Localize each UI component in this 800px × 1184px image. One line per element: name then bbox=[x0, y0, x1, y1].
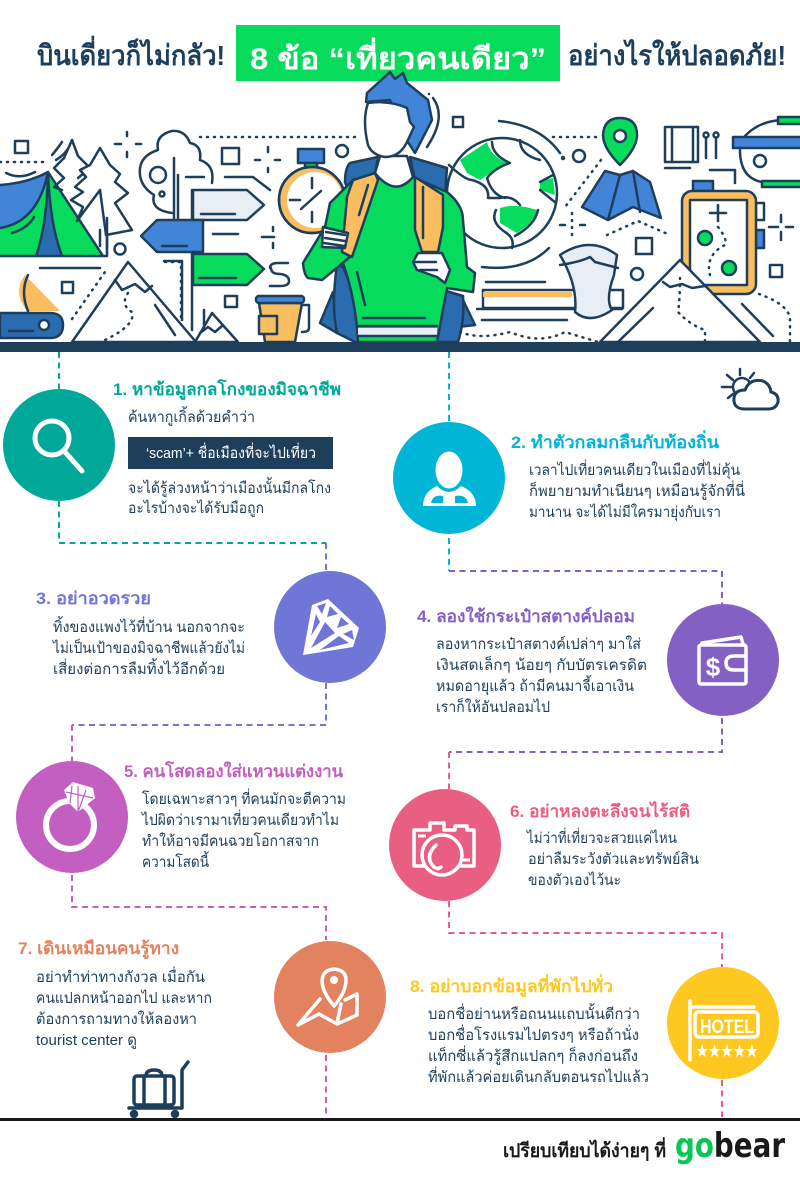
neck bbox=[375, 156, 413, 187]
text: tip 3 body bbox=[52, 616, 245, 678]
panel: tip 1 bbox=[3, 379, 341, 517]
panel: tip 4 bbox=[417, 604, 779, 716]
text: tip 5 body bbox=[141, 788, 346, 871]
icon: camera bbox=[389, 789, 501, 901]
footer: comparison line and logo: เปรียบเทียบได้ง่ายๆ ที่ bbox=[503, 1137, 666, 1162]
panel: tip 6 bbox=[389, 789, 699, 901]
icon: right mountain bbox=[460, 260, 790, 342]
title: บินเดี่ยวก็ไม่กลัว! bbox=[37, 35, 225, 71]
text: tip 4 body: เราก็ให้อันปลอมไป bbox=[436, 697, 550, 716]
text: tip 2 body bbox=[529, 459, 745, 522]
text: tip 5 body: ความโสดนี้ bbox=[142, 851, 209, 871]
heading: tip 4: 4. ลองใช้กระเป๋าสตางค์ปลอม bbox=[417, 606, 635, 626]
panel: tip 8 bbox=[410, 967, 779, 1086]
text: tip 3 body: เสี่ยงต่อการลืมทิ้งไว้อีกด้วย bbox=[53, 658, 225, 678]
icon: magnifier bbox=[3, 389, 115, 501]
footer: comparison line and logo bbox=[503, 1126, 785, 1166]
footer: comparison line and logo: gobear bbox=[675, 1126, 785, 1166]
icon: wallet: $ bbox=[706, 652, 721, 682]
icon: signpost bbox=[141, 190, 289, 330]
icon: diamond bbox=[274, 571, 386, 683]
left hand bbox=[322, 227, 348, 248]
backpack straps behind bbox=[345, 157, 378, 195]
heading: tip 3: 3. อย่าอวดรวย bbox=[36, 589, 151, 608]
icon: hotel sign bbox=[667, 967, 779, 1079]
panel: tip 5 bbox=[16, 761, 346, 873]
icon: luggage trolley bbox=[129, 1062, 188, 1116]
text: tip 4 body: ลองหากระเป๋าสตางค์เปล่าๆ มาใส่ bbox=[436, 635, 641, 653]
panel: tip 3 bbox=[36, 571, 386, 683]
text: tip 1 body: อะไรบ้างจะได้รับมือถูก bbox=[128, 499, 264, 517]
icon: axe and lines bbox=[477, 245, 623, 320]
face bbox=[365, 102, 414, 157]
icon: stopwatch bbox=[279, 149, 345, 233]
icon: tent bbox=[0, 141, 107, 256]
right hand bbox=[413, 253, 450, 283]
text: tip 7 body: คนแปลกหน้าออกไป และหาก bbox=[36, 989, 212, 1007]
icon: hotel sign: HOTEL bbox=[700, 1017, 754, 1038]
heading: tip 1: 1. หาข้อมูลกลโกงของมิจฉาชีพ bbox=[113, 379, 341, 401]
text: tip 7 body: tourist center ดู bbox=[36, 1032, 137, 1049]
icon: hotel sign: ★★★★★ bbox=[696, 1043, 758, 1060]
panel: tip 7 bbox=[18, 938, 386, 1053]
icon: map pin bbox=[553, 118, 637, 207]
sweater bbox=[343, 174, 475, 342]
icon: mug bbox=[256, 296, 309, 342]
icon: round tree bbox=[115, 131, 355, 218]
text: tip 4 body bbox=[436, 635, 647, 716]
left arm bbox=[303, 180, 353, 280]
icon: globe bbox=[447, 117, 585, 268]
text: tip 8 body: แท็กซี่แล้วรู้สึกแปลกๆ ก็ลงก่อนถึง bbox=[428, 1045, 638, 1065]
text: tip 2 body: มานาน จะได้ไม่มีใครมายุ่งกับเรา bbox=[529, 503, 721, 522]
text: tip 6 body: ไม่ว่าที่เที่ยวจะสวยแค่ไหน bbox=[526, 827, 677, 847]
text: tip 6 body: ของตัวเองไว้นะ bbox=[528, 871, 621, 889]
icon: wallet bbox=[667, 604, 779, 716]
jacket sides bbox=[320, 292, 337, 333]
heading: tip 8: 8. อย่าบอกข้อมูลที่พักไปทั่ว bbox=[410, 974, 613, 998]
heading: tip 6: 6. อย่าหลงตะลึงจนไร้สติ bbox=[510, 801, 690, 821]
icon: diamond ring bbox=[16, 761, 128, 873]
text: tip 2 body: ก็พยายามทำเนียนๆ เหมือนรู้จักที่นี่ bbox=[529, 480, 745, 500]
title: อย่างไรให้ปลอดภัย! bbox=[568, 39, 786, 71]
icon: map and pin bbox=[274, 941, 386, 1053]
title bbox=[37, 25, 786, 81]
panel: tip 2 bbox=[393, 422, 745, 534]
hair bbox=[366, 72, 432, 153]
route: dashed connectors bbox=[59, 352, 722, 1118]
text: tip 5 body: ไปผิดว่าเรามาเที่ยวคนเดียวทำไม bbox=[141, 809, 339, 829]
heading: tip 7: 7. เดินเหมือนคนรู้ทาง bbox=[18, 938, 179, 960]
icon: person bbox=[393, 422, 505, 534]
icon: sun and cloud bbox=[722, 369, 778, 409]
text: tip 8 body: ที่พักแล้วค่อยเดินกลับตอนรถไปแล้ว bbox=[428, 1066, 649, 1086]
icon: mountain and path bbox=[40, 262, 238, 342]
text: tip 7 body bbox=[36, 966, 212, 1049]
icon: notebook, pins, pot bbox=[665, 117, 800, 187]
illustration: travel scene bbox=[0, 72, 800, 342]
text: tip 7 body: อย่าทำท่าทางกังวล เมื่อกัน bbox=[36, 966, 205, 986]
heading: tip 5: 5. คนโสดลองใส่แหวนแต่งงาน bbox=[124, 761, 343, 781]
icon: pine trees bbox=[52, 140, 132, 254]
text: tip 4 body: หมดอายุแล้ว ถ้ามีคนมาจี้เอาเงิน bbox=[436, 675, 634, 696]
text: tip 6 body: อย่าลืมระวังตัวและทรัพย์สิน bbox=[528, 851, 699, 868]
text: tip 8 body: บอกชื่อย่านหรือถนนแถบนั้นดีกว่า bbox=[428, 1003, 640, 1023]
text: tip 5 body: ทำให้อาจมีคนฉวยโอกาสจาก bbox=[142, 832, 319, 850]
text: tip 3 body: ทิ้งของแพงไว้ที่บ้าน นอกจากจะ bbox=[53, 616, 245, 636]
text: tip 4 body: เงินสดเล็กๆ น้อยๆ กับบัตรเครดิต bbox=[436, 655, 647, 674]
text: tip 8 body bbox=[428, 1003, 649, 1086]
text: tip 6 body bbox=[526, 827, 699, 889]
text: tip 3 body: ไม่เป็นเป้าของมิจฉาชีพแล้วยังไม่ bbox=[52, 638, 245, 657]
title: 8 ข้อ “เที่ยวคนเดียว” bbox=[250, 37, 546, 76]
text: tip 2 body: เวลาไปเที่ยวคนเดียวในเมืองที่ไม่คุ้น bbox=[529, 459, 740, 480]
text: tip 8 body: บอกชื่อโรงแรมไปตรงๆ หรือถ้านั่ง bbox=[428, 1024, 639, 1044]
callout: search keyword bbox=[128, 437, 333, 469]
heading: tip 2: 2. ทำตัวกลมกลืนกับท้องถิ่น bbox=[511, 430, 719, 452]
icon: traveller bbox=[303, 72, 475, 342]
footer rule bbox=[0, 1118, 800, 1121]
callout: search keyword: ‘scam’+ ชื่อเมืองที่จะไปเที่ยว bbox=[146, 442, 316, 462]
text: tip 1 intro: ค้นหากูเกิ้ลด้วยคำว่า bbox=[128, 406, 255, 426]
text: tip 5 body: โดยเฉพาะสาวๆ ที่คนมักจะตีความ bbox=[142, 788, 346, 808]
text: tip 1 body: จะได้รู้ล่วงหน้าว่าเมืองนั้นมีกลโกง bbox=[128, 477, 331, 497]
icon: folded map bbox=[560, 171, 670, 280]
icon: gps device bbox=[682, 181, 793, 294]
orange straps bbox=[342, 173, 378, 257]
icon: pocket knife bbox=[0, 275, 73, 338]
top band bbox=[0, 342, 800, 352]
text: tip 1 body bbox=[128, 477, 331, 517]
text: tip 7 body: ต้องการถามทางให้ลองหา bbox=[36, 1010, 197, 1028]
